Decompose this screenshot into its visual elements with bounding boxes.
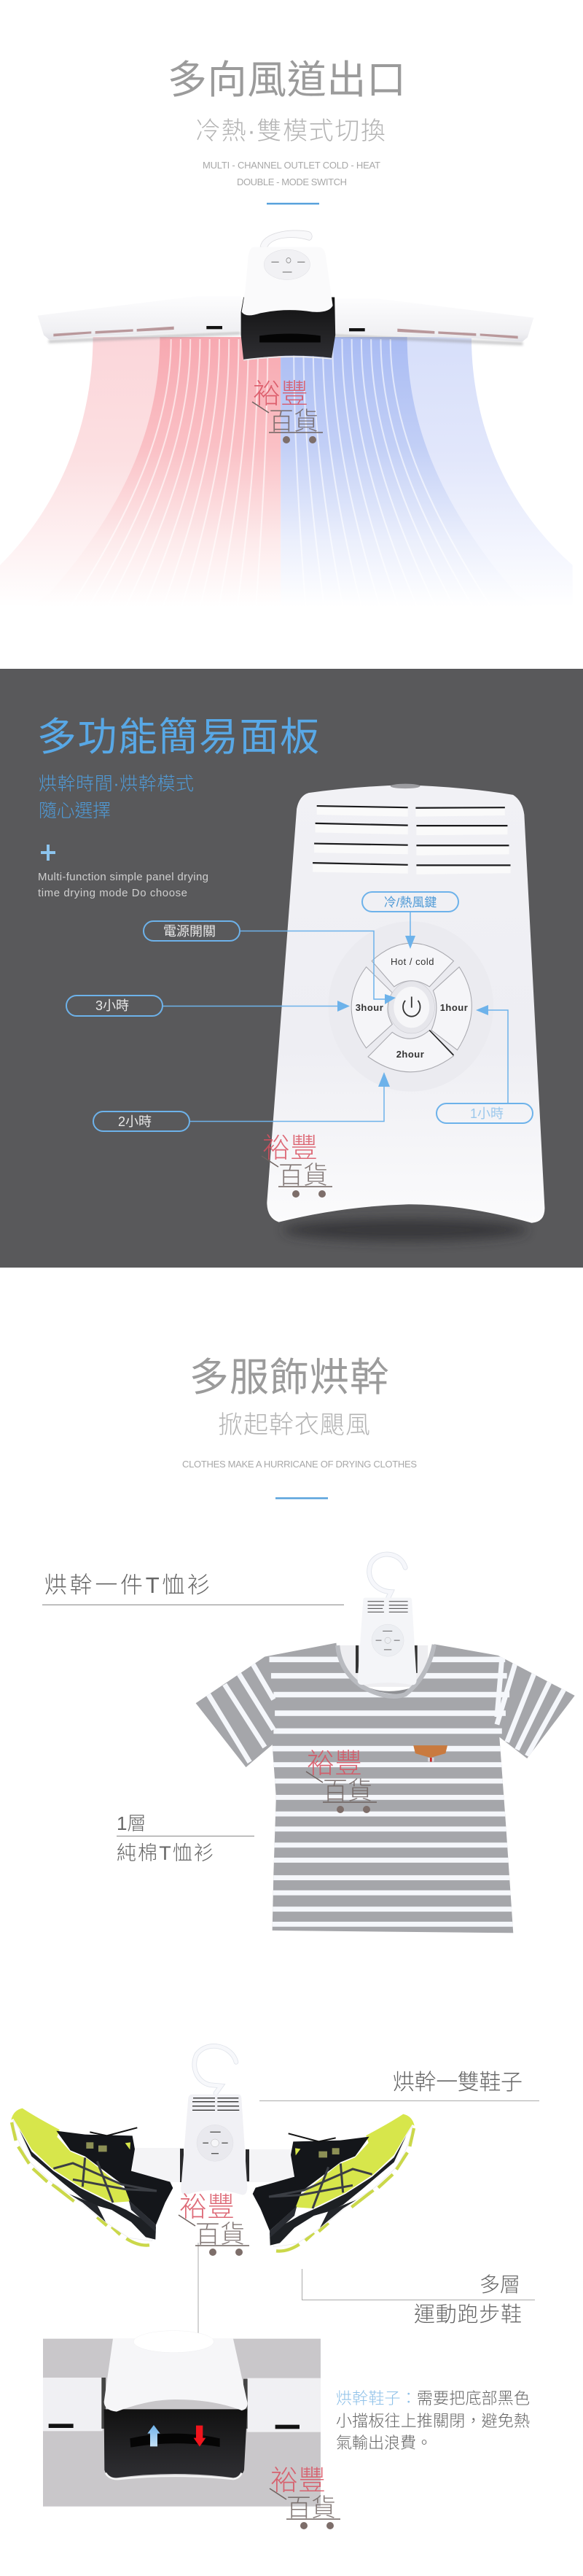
blue description: 隨心選擇 xyxy=(39,801,111,821)
label: one layer cotton t-shirt: 1層 xyxy=(117,1812,146,1834)
callout: 2 hours xyxy=(93,1072,390,1131)
airflow illustration xyxy=(0,337,573,611)
watermark: 百貨 xyxy=(286,2494,336,2522)
illustration: t-shirt on hanger xyxy=(189,1554,581,1938)
icon: power xyxy=(403,996,420,1017)
english caption: MULTI - CHANNEL OUTLET COLD - HEAT xyxy=(203,160,380,171)
icon: red down arrow xyxy=(194,2426,206,2447)
watermark xyxy=(262,1133,332,1198)
device body xyxy=(267,785,544,1223)
text block: shoe drying note xyxy=(336,2389,530,2452)
dark background xyxy=(0,669,583,1268)
left shoe xyxy=(11,2108,173,2246)
english caption xyxy=(203,160,380,187)
icon: hook xyxy=(195,2046,236,2093)
callout: 1 hour xyxy=(437,1005,533,1123)
watermark xyxy=(270,2466,340,2529)
blue description: 烘幹時間·烘幹模式 xyxy=(39,774,194,794)
text block: shoe drying note: 小擋板往上推關閉，避免熱 xyxy=(336,2412,530,2430)
icon: blue up arrow xyxy=(147,2425,160,2446)
panel: multi-function control panel xyxy=(0,669,583,1268)
watermark: 百貨 xyxy=(278,1162,328,1190)
callout: 2 hours: 2小時 xyxy=(118,1114,152,1129)
label: one t-shirt: 烘幹一件T恤衫 xyxy=(44,1572,210,1598)
vents xyxy=(313,805,511,874)
watermark: 百貨 xyxy=(323,1777,372,1805)
vent close-up photo xyxy=(43,2331,321,2507)
watermark: 裕豐 xyxy=(307,1749,362,1780)
heading: 多功能簡易面板 xyxy=(37,715,319,759)
button labels: 3hour xyxy=(356,1002,383,1013)
label: multi-layer running shoes: 多層 xyxy=(480,2273,520,2296)
subtitle: 掀起幹衣颶風 xyxy=(218,1411,370,1439)
watermark: 裕豐 xyxy=(262,1133,318,1164)
hanger device xyxy=(241,230,335,360)
red airflow xyxy=(0,337,281,611)
control panel illustration xyxy=(267,784,544,1241)
label: multi-layer running shoes: 運動跑步鞋 xyxy=(414,2303,522,2327)
callout: 3 hours xyxy=(66,996,350,1016)
watermark: 裕豐 xyxy=(179,2192,235,2223)
callout: power switch xyxy=(144,921,396,1004)
button labels: 2hour xyxy=(396,1049,424,1060)
device xyxy=(358,1598,417,1685)
watermark: 裕豐 xyxy=(253,379,308,410)
text block: shoe drying note: 氣輸出浪費。 xyxy=(336,2434,432,2452)
button labels: 1hour xyxy=(440,1002,468,1013)
label: multi-layer running shoes xyxy=(302,2269,535,2327)
section: clothes drying xyxy=(42,1356,581,1938)
label: one layer cotton t-shirt xyxy=(117,1812,254,1864)
label: one layer cotton t-shirt: 純棉T恤衫 xyxy=(117,1842,214,1864)
button labels: Hot / cold xyxy=(391,956,434,967)
watermark xyxy=(179,2192,249,2256)
english caption: CLOTHES MAKE A HURRICANE OF DRYING CLOTHES xyxy=(182,1459,417,1470)
left arm xyxy=(38,296,241,341)
text block: shoe drying note: 烘幹鞋子：需要把底部黑色 xyxy=(336,2389,530,2408)
t-shirt xyxy=(189,1639,581,1938)
watermark xyxy=(306,1749,377,1813)
watermark xyxy=(252,379,323,443)
english description: time drying mode Do choose xyxy=(38,887,187,899)
english caption: DOUBLE - MODE SWITCH xyxy=(237,176,347,187)
icon: hook xyxy=(369,1554,405,1598)
english description xyxy=(38,871,208,899)
right arm xyxy=(330,298,533,344)
callout: 1 hour: 1小時 xyxy=(470,1106,504,1121)
shoe hanger device xyxy=(181,2046,247,2195)
watermark: 百貨 xyxy=(195,2221,245,2249)
right shoe xyxy=(253,2114,415,2251)
subtitle: 冷熱·雙模式切換 xyxy=(195,117,386,145)
callout: power switch: 電源開關 xyxy=(163,924,216,939)
label: one pair of shoes: 烘幹一雙鞋子 xyxy=(393,2071,523,2095)
button labels xyxy=(356,956,468,1060)
blue airflow xyxy=(281,337,573,611)
english description: Multi-function simple panel drying xyxy=(38,871,208,883)
callout: hot cold key xyxy=(362,892,458,949)
hanger arms xyxy=(133,2148,294,2182)
icon: plus xyxy=(41,845,55,861)
accent line xyxy=(267,203,319,204)
dial xyxy=(329,921,493,1092)
watermark: 百貨 xyxy=(269,408,318,435)
watermark: 裕豐 xyxy=(270,2466,326,2497)
callout: 3 hours: 3小時 xyxy=(95,998,129,1013)
connector line xyxy=(197,2243,199,2339)
orange tag xyxy=(413,1745,447,1761)
callout: hot cold key: 冷/熱風鍵 xyxy=(384,896,437,909)
title: 多向風道出口 xyxy=(168,58,406,102)
title: 多服飾烘幹 xyxy=(189,1356,389,1400)
accent line xyxy=(275,1497,328,1500)
blue description xyxy=(39,774,194,821)
section: shoe drying xyxy=(11,2046,539,2529)
section: multi-channel outlet xyxy=(0,58,573,611)
